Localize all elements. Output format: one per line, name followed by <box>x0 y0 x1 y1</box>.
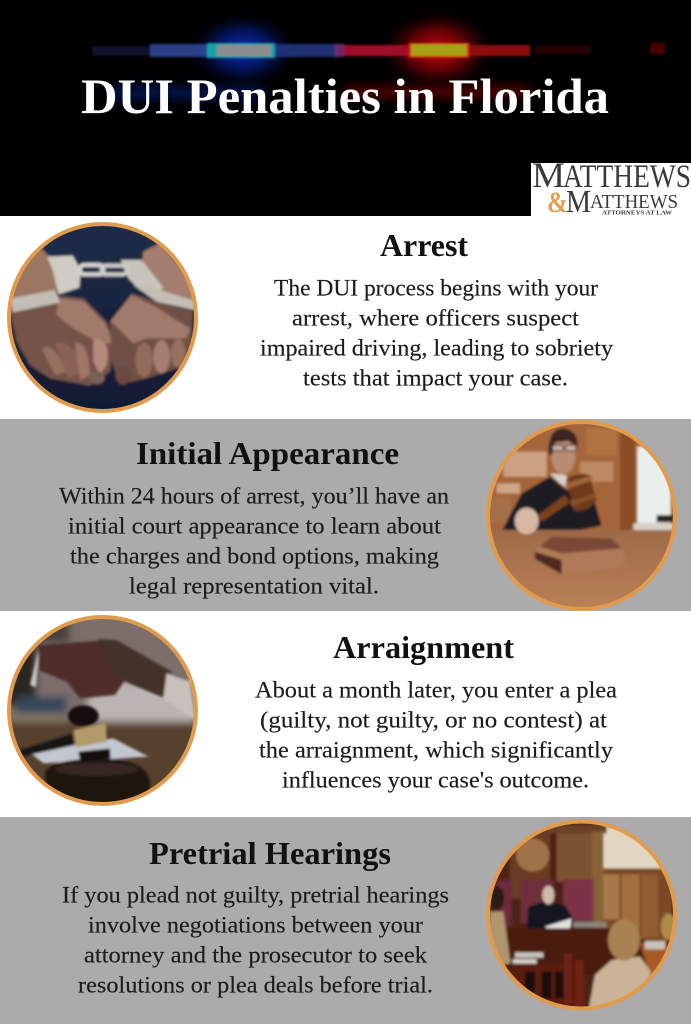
photo ring <box>9 224 196 411</box>
text: arrest description <box>260 276 614 390</box>
photo ring <box>488 422 675 609</box>
panel: pretrial hearings <box>62 815 685 1024</box>
text: arrest description: impaired driving, leading to sobriety <box>260 336 614 360</box>
text: arraignment description: (guilty, not guilty, or no contest) at <box>260 708 608 732</box>
text: initial appearance description: initial court appearance to learn about <box>68 514 442 538</box>
panel: arraignment <box>0 610 617 818</box>
text: arraignment description <box>255 678 617 792</box>
gray band: pretrial hearings <box>0 817 691 1024</box>
photo ring <box>9 617 196 804</box>
text: pretrial hearings description: involve negotiations between your <box>88 912 423 938</box>
heading: arraignment: Arraignment <box>333 629 514 665</box>
text: arrest description: arrest, where officers suspect <box>292 306 580 330</box>
logo: ATTHEWS <box>590 191 678 213</box>
panel: arrest <box>0 215 614 420</box>
heading: initial appearance: Initial Appearance <box>136 435 399 471</box>
text: initial appearance description: the charges and bond options, making <box>70 544 440 568</box>
header panel <box>0 0 691 219</box>
text: arrest description: tests that impact your case. <box>303 366 568 390</box>
logo: M <box>566 183 591 219</box>
police lights background <box>92 8 665 100</box>
text: pretrial hearings description: If you plead not guilty, pretrial hearings <box>62 882 449 908</box>
text: arraignment description: influences your case's outcome. <box>282 768 589 792</box>
text: initial appearance description <box>59 484 450 598</box>
logo: M <box>532 155 565 195</box>
photo: judge with gavel <box>486 420 677 611</box>
gray band: initial appearance <box>0 419 691 611</box>
heading: pretrial hearings: Pretrial Hearings <box>149 835 391 871</box>
logo: ATTORNEYS AT LAW <box>602 210 673 216</box>
text: arrest description: The DUI process begins with your <box>274 276 598 300</box>
text: arraignment description: About a month later, you enter a plea <box>255 678 617 702</box>
photo: courtroom <box>486 820 677 1010</box>
text: initial appearance description: legal representation vital. <box>129 574 379 598</box>
text: pretrial hearings description: attorney and the prosecutor to seek <box>84 942 428 968</box>
photo: handcuffed hands <box>7 222 198 413</box>
text: pretrial hearings description: resolutions or plea deals before trial. <box>78 972 433 998</box>
title: DUI Penalties in Florida <box>81 68 609 124</box>
photo: handshake and gavel <box>7 615 198 806</box>
photo ring <box>488 822 675 1008</box>
panel: initial appearance <box>59 415 685 617</box>
logo <box>531 155 691 219</box>
text: initial appearance description: Within 24 hours of arrest, you’ll have an <box>59 484 450 508</box>
logo: & <box>547 186 568 219</box>
heading: arrest: Arrest <box>380 227 468 263</box>
text: pretrial hearings description <box>62 882 449 998</box>
text: arraignment description: the arraignment, which significantly <box>259 738 614 762</box>
